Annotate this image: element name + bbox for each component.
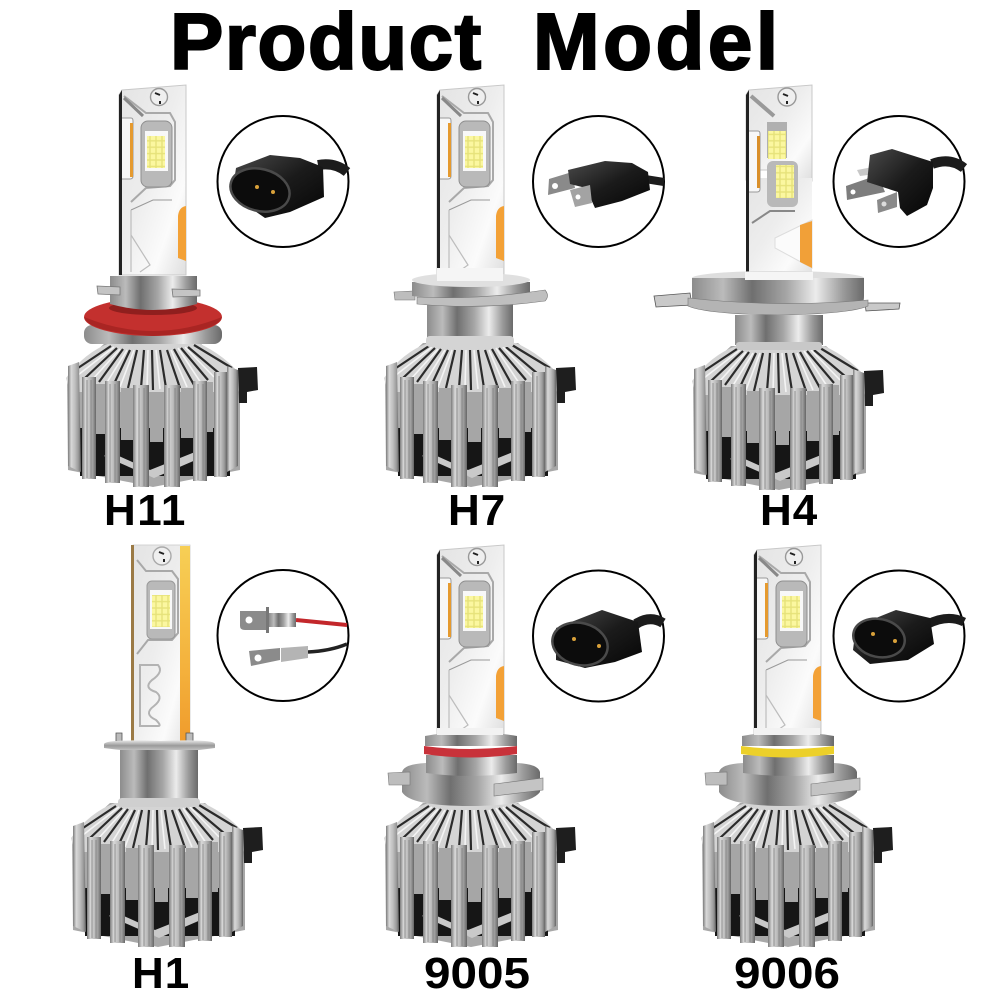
model label: H4: H4 <box>760 486 818 535</box>
connector circle: H1 <box>218 570 348 701</box>
connector circle: H7 <box>533 116 664 247</box>
bulb: H7 <box>384 85 576 487</box>
model label: H7: H7 <box>448 486 506 535</box>
model label: H11: H11 <box>104 486 187 535</box>
model label: 9006: 9006 <box>734 949 840 998</box>
bulb: H11 <box>66 85 258 487</box>
bulb: H1 <box>71 545 263 947</box>
connector circle: 9005 <box>533 570 664 702</box>
model label: 9005: 9005 <box>424 949 530 998</box>
bulb: H4 <box>654 85 900 490</box>
connector circle: 9006 <box>834 570 964 702</box>
connector circle: H4 <box>834 116 964 247</box>
bulb: 9005 <box>384 545 576 947</box>
connector circle: H11 <box>218 116 348 247</box>
model label: H1: H1 <box>132 949 190 998</box>
bulb: 9006 <box>701 545 893 947</box>
